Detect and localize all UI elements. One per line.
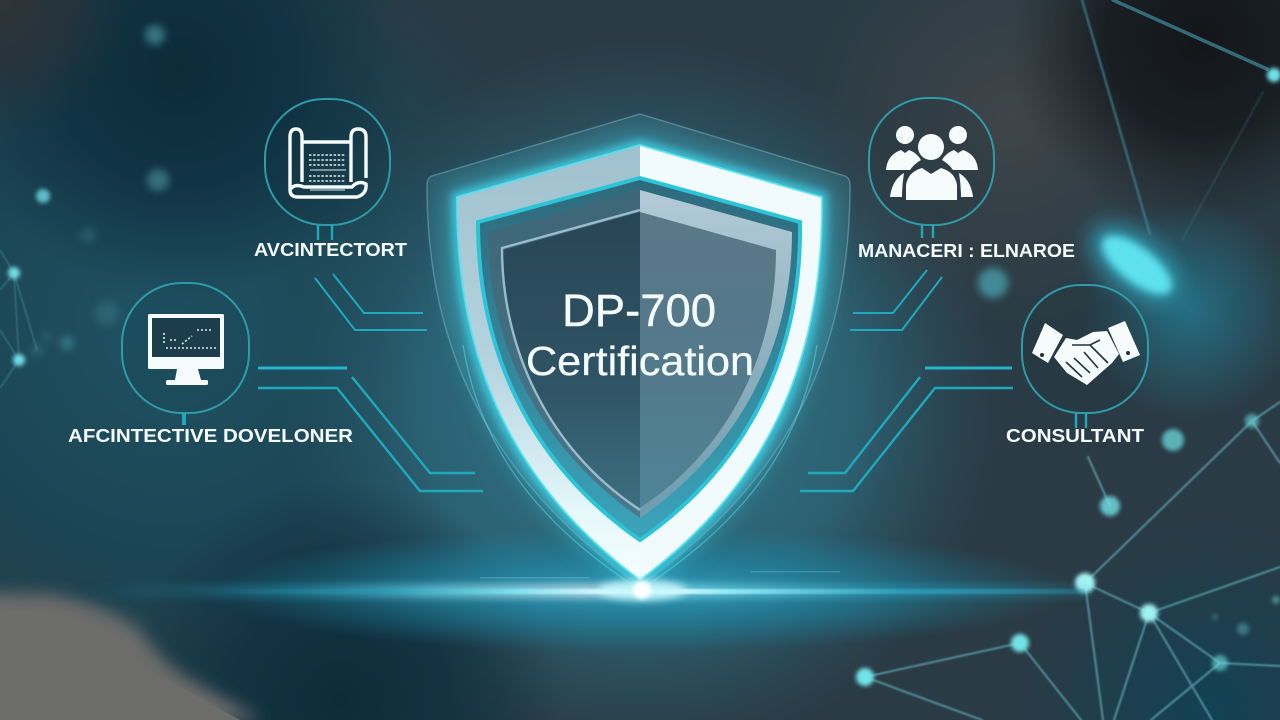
node: architect bbox=[254, 99, 407, 260]
icon: team bbox=[886, 126, 978, 200]
connector lines: left bbox=[258, 274, 483, 491]
DP-700: DP-700 bbox=[562, 285, 716, 336]
ring bbox=[869, 98, 994, 225]
shield outer arc accents bbox=[463, 345, 817, 590]
stub bbox=[182, 413, 186, 425]
network: left bbox=[0, 25, 169, 388]
shield light band bbox=[457, 145, 822, 580]
stubs bbox=[922, 225, 933, 238]
label: MANACERI : ELNAROE bbox=[858, 241, 1075, 261]
shield cyan edge bbox=[457, 145, 822, 580]
ring bbox=[1022, 285, 1148, 413]
shield panel outline bbox=[502, 210, 640, 510]
horizontal light beam bbox=[80, 571, 1090, 598]
label: CONSULTANT bbox=[1006, 426, 1144, 446]
icon: handshake bbox=[1032, 321, 1140, 385]
connector lines: right bbox=[800, 270, 1013, 491]
shield grey band right bbox=[640, 190, 792, 518]
grey foreground blur bbox=[0, 592, 262, 720]
shield wide halo bbox=[457, 145, 822, 580]
shield title bbox=[526, 285, 754, 384]
shield panel left bbox=[503, 212, 640, 508]
node: consultant bbox=[1006, 285, 1148, 446]
shield panel right bbox=[640, 212, 776, 508]
icon: monitor bbox=[148, 314, 224, 385]
ring bbox=[122, 283, 249, 413]
network: bottom right bbox=[856, 402, 1280, 720]
shield grey band left bbox=[488, 190, 640, 518]
stubs bbox=[1076, 413, 1086, 428]
shield tip flare bbox=[598, 580, 686, 600]
glowing light streak bbox=[978, 210, 1192, 316]
network: top right bbox=[1082, 0, 1280, 240]
stubs bbox=[318, 225, 332, 240]
shield teal inner band bbox=[478, 178, 800, 540]
icon: blueprint scroll bbox=[290, 129, 366, 197]
shield outer outline bbox=[427, 114, 850, 585]
label: AFCINTECTIVE DOVELONER bbox=[68, 426, 353, 446]
label: AVCINTECTORT bbox=[254, 240, 407, 260]
shield band left half bbox=[457, 145, 640, 580]
node: manager bbox=[858, 98, 1075, 261]
ring bbox=[265, 99, 390, 225]
shield glow bbox=[457, 145, 822, 580]
Certification: Certification bbox=[526, 338, 754, 384]
node: developer bbox=[68, 283, 353, 446]
shield bbox=[427, 114, 850, 600]
